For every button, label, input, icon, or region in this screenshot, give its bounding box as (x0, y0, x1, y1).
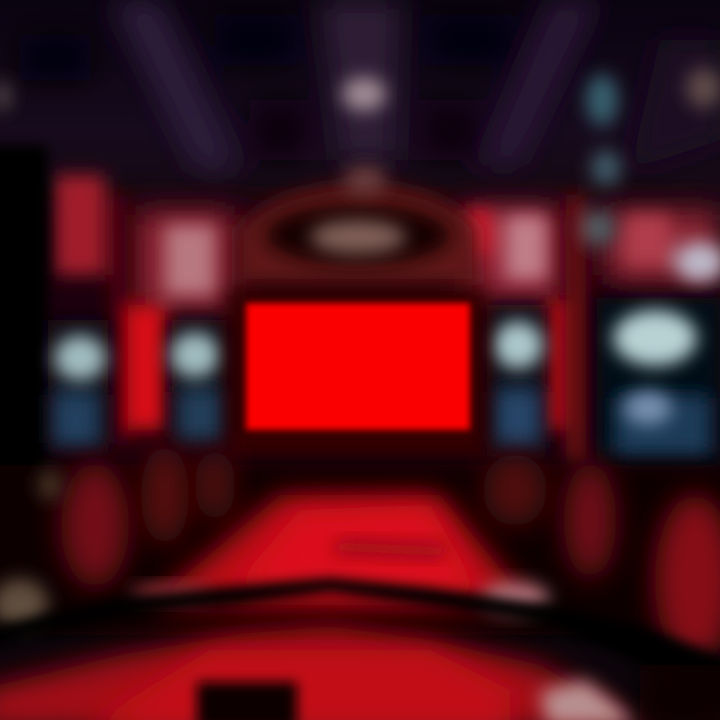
black curved railing (0, 578, 720, 710)
wall posters and highlights (55, 175, 720, 445)
foreground red floor (0, 626, 650, 720)
left seat highlights (0, 470, 62, 629)
right blue post (566, 74, 621, 465)
upper wall band (0, 200, 720, 480)
bottom right dark corner (640, 665, 720, 720)
ceiling (0, 0, 720, 220)
left black pillar (0, 145, 48, 625)
red carpet (130, 495, 549, 613)
foreground black box (197, 682, 297, 720)
central red screen (246, 303, 470, 430)
marquee arch (238, 166, 478, 285)
seating rows dark area (0, 445, 720, 665)
foreground white highlight (540, 680, 640, 720)
screen frame shadow (228, 288, 486, 458)
side screens (48, 298, 720, 463)
ceiling lights (0, 68, 720, 111)
